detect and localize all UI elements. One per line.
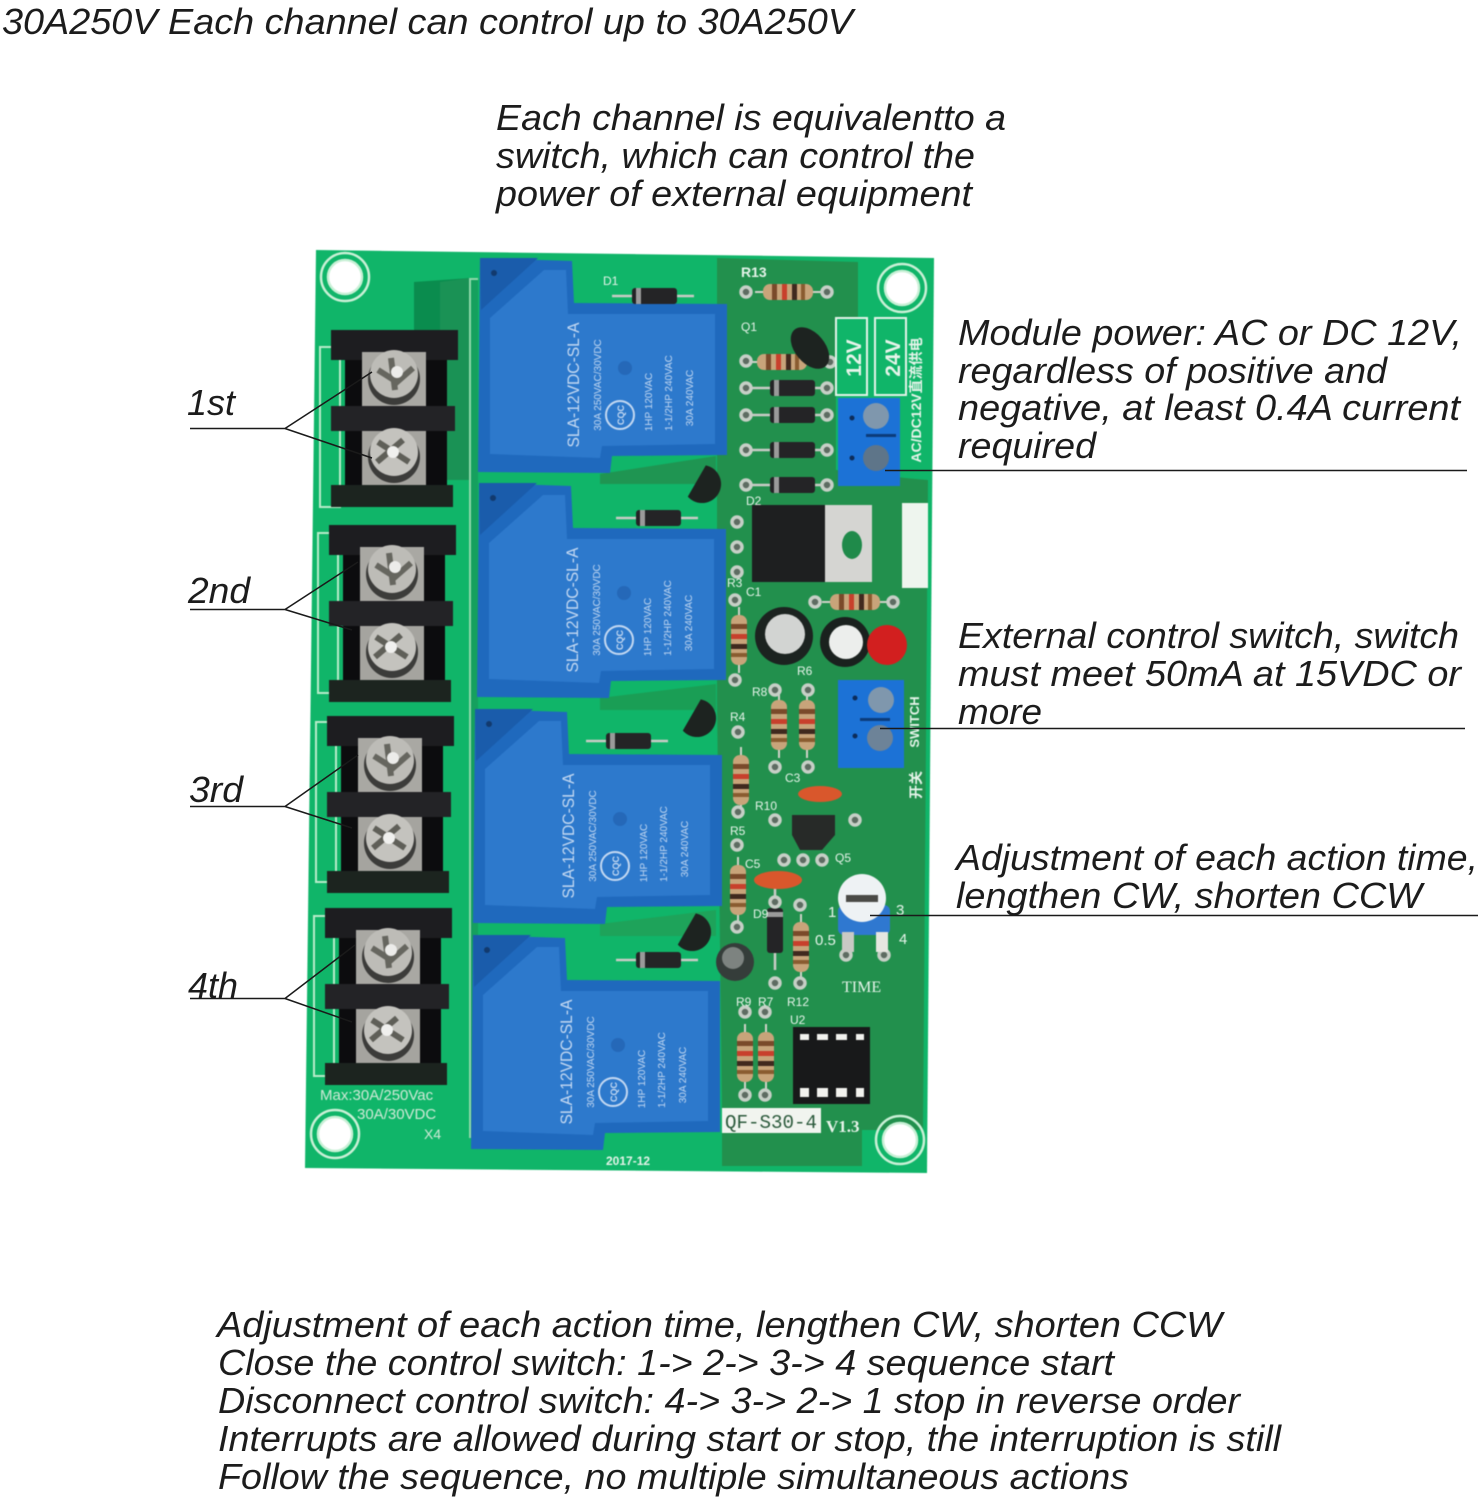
board silkscreen labels: R10 — [755, 799, 777, 813]
silk outlines — [314, 347, 340, 1076]
relay 4: 1-1/2HP 240VAC — [657, 1032, 668, 1108]
blue switch terminal — [838, 680, 904, 768]
board silkscreen labels: U2 — [790, 1013, 806, 1027]
label: 3rd: 3rd — [189, 769, 244, 810]
callout: module power: negative, at least 0.4A current — [958, 387, 1462, 428]
board silkscreen labels: D2 — [746, 494, 762, 508]
capacitors and LED — [716, 607, 907, 981]
text block: sequence notes: Adjustment of each action time, lengthen CW, shorten CCW — [215, 1304, 1225, 1345]
text block: channel is a switch: switch, which can control the — [496, 135, 975, 176]
board silkscreen labels: 1 — [828, 904, 836, 921]
model label: QF-S30-4 — [725, 1112, 817, 1134]
board silkscreen labels: TIME — [842, 979, 881, 996]
callout: module power: Module power: AC or DC 12V, — [958, 312, 1462, 353]
relay 2: SLA-12VDC-SL-A — [563, 547, 582, 672]
relay 3: 30A 250VAC/30VDC — [588, 790, 599, 882]
text block: channel is a switch: power of external equipment — [495, 173, 974, 214]
board silkscreen labels: C3 — [785, 771, 801, 785]
board silkscreen labels: AC/DC12V直流供电 — [908, 337, 924, 463]
board silkscreen labels: D1 — [603, 274, 619, 288]
board silkscreen labels: Max:30A/250Vac — [320, 1087, 434, 1104]
mounting holes — [311, 253, 926, 1164]
text block: sequence notes: Close the control switch: 1-> 2-> 3-> 4 sequence start — [218, 1342, 1116, 1383]
relay 3: 1HP 120VAC — [639, 824, 650, 882]
board silkscreen labels: R9 — [736, 995, 752, 1009]
diodes — [586, 288, 832, 970]
relay 1: 30A 250VAC/30VDC — [593, 339, 604, 431]
dark trace area — [414, 278, 716, 1140]
text block: sequence notes: Follow the sequence, no multiple simultaneous actions — [218, 1456, 1129, 1497]
callout: external control switch: External control switch, switch — [958, 615, 1459, 656]
terminal block 4 — [325, 908, 452, 1085]
callout: external control switch: more — [958, 691, 1042, 732]
callout: external control switch: must meet 50mA at 15VDC or — [958, 653, 1463, 694]
label: 4th: 4th — [188, 965, 238, 1006]
white silk block — [902, 503, 928, 588]
label: 4th — [188, 945, 355, 1022]
text block: channel is a switch — [495, 97, 1006, 214]
board silkscreen labels: R4 — [730, 710, 746, 724]
terminal block 3 — [327, 716, 454, 893]
callout: module power: required — [958, 425, 1097, 466]
relay 4: 30A 240VAC — [678, 1047, 689, 1103]
board silkscreen labels: 开关 — [908, 771, 924, 799]
model label: V1.3 — [826, 1117, 860, 1136]
board silkscreen labels: 12V — [843, 339, 866, 377]
relay board photo — [305, 250, 934, 1173]
IC U2 — [793, 1027, 870, 1104]
relay 3: CQC — [611, 856, 621, 876]
relay 2: 1HP 120VAC — [643, 598, 654, 656]
board silkscreen labels: R6 — [797, 664, 813, 678]
relay 3: SLA-12VDC-SL-A — [559, 773, 578, 898]
relay 4 — [471, 935, 720, 1150]
transistors — [677, 320, 837, 958]
board silkscreen labels: 0.5 — [815, 932, 836, 949]
board silkscreen labels: Q5 — [835, 851, 851, 865]
relay 1: SLA-12VDC-SL-A — [564, 322, 583, 448]
board silkscreen labels: SWITCH — [907, 696, 922, 748]
ceramic capacitors — [754, 786, 842, 889]
model label — [722, 1108, 860, 1136]
text block: channel is a switch: Each channel is equivalentto a — [496, 97, 1006, 138]
board silkscreen labels: C1 — [746, 585, 762, 599]
relay 2: 30A 240VAC — [684, 595, 695, 651]
relay 1 — [478, 258, 727, 473]
relay 3 — [473, 709, 722, 924]
relay 4: 30A 250VAC/30VDC — [586, 1016, 597, 1108]
relay 2: CQC — [615, 630, 625, 650]
label: 1st: 1st — [187, 382, 237, 423]
relay 2 — [477, 483, 726, 698]
relay 4: SLA-12VDC-SL-A — [557, 999, 576, 1124]
terminal block 1 — [331, 330, 458, 507]
label: 2nd — [187, 562, 358, 630]
callout: module power — [885, 312, 1467, 470]
label: 1st — [187, 372, 372, 458]
relay 1: CQC — [616, 404, 626, 425]
board silkscreen labels — [320, 264, 924, 1168]
board silkscreen labels: Q1 — [741, 320, 757, 334]
board silkscreen labels: 30A/30VDC — [357, 1106, 436, 1123]
label: 2nd: 2nd — [187, 570, 251, 611]
relay 4: 1HP 120VAC — [637, 1050, 648, 1108]
relay 3: 1-1/2HP 240VAC — [659, 806, 670, 882]
label: 3rd — [189, 755, 358, 828]
relay 2: 1-1/2HP 240VAC — [663, 580, 674, 656]
relay 4: CQC — [609, 1082, 619, 1102]
board silkscreen labels: D9 — [753, 907, 769, 921]
board silkscreen labels: R13 — [741, 264, 767, 280]
voltage regulator — [752, 505, 872, 582]
relay 1: 30A 240VAC — [685, 370, 696, 426]
PCB base — [305, 250, 934, 1173]
callout: action time adjustment: lengthen CW, shorten CCW — [956, 875, 1425, 916]
relay 1: 1HP 120VAC — [644, 373, 655, 431]
resistors — [730, 284, 888, 1090]
terminal block 2 — [329, 525, 456, 702]
board silkscreen labels: R3 — [727, 576, 743, 590]
trimmer potentiometer — [838, 874, 890, 952]
board silkscreen labels: X4 — [424, 1126, 441, 1142]
board silkscreen labels: 2017-12 — [606, 1154, 650, 1168]
callout: action time adjustment: Adjustment of each action time, — [954, 837, 1478, 878]
board silkscreen labels: 4 — [899, 931, 907, 948]
title: 30A250V Each channel can control up to 30A250V — [2, 1, 856, 42]
solder pads — [730, 287, 898, 1100]
relay 3: 30A 240VAC — [680, 821, 691, 877]
board silkscreen labels: C5 — [745, 857, 761, 871]
12V and 24V boxes — [836, 318, 906, 395]
board silkscreen labels: 24V — [882, 339, 905, 377]
text block: sequence notes: Disconnect control switch: 4-> 3-> 2-> 1 stop in reverse order — [218, 1380, 1242, 1421]
relay 2: 30A 250VAC/30VDC — [592, 564, 603, 656]
text block: sequence notes — [215, 1304, 1282, 1497]
callout: module power: regardless of positive and — [958, 350, 1388, 391]
board silkscreen labels: R12 — [787, 995, 809, 1009]
board silkscreen labels: R5 — [730, 824, 746, 838]
callout: action time adjustment — [870, 837, 1478, 916]
board silkscreen labels: R8 — [752, 685, 768, 699]
blue power terminal — [838, 398, 900, 486]
relay 1: 1-1/2HP 240VAC — [664, 355, 675, 431]
callout: external control switch — [880, 615, 1465, 732]
board silkscreen labels: R7 — [758, 995, 774, 1009]
text block: sequence notes: Interrupts are allowed during start or stop, the interruption is still — [218, 1418, 1282, 1459]
component area — [717, 258, 928, 1166]
board silkscreen labels: 3 — [896, 902, 904, 919]
